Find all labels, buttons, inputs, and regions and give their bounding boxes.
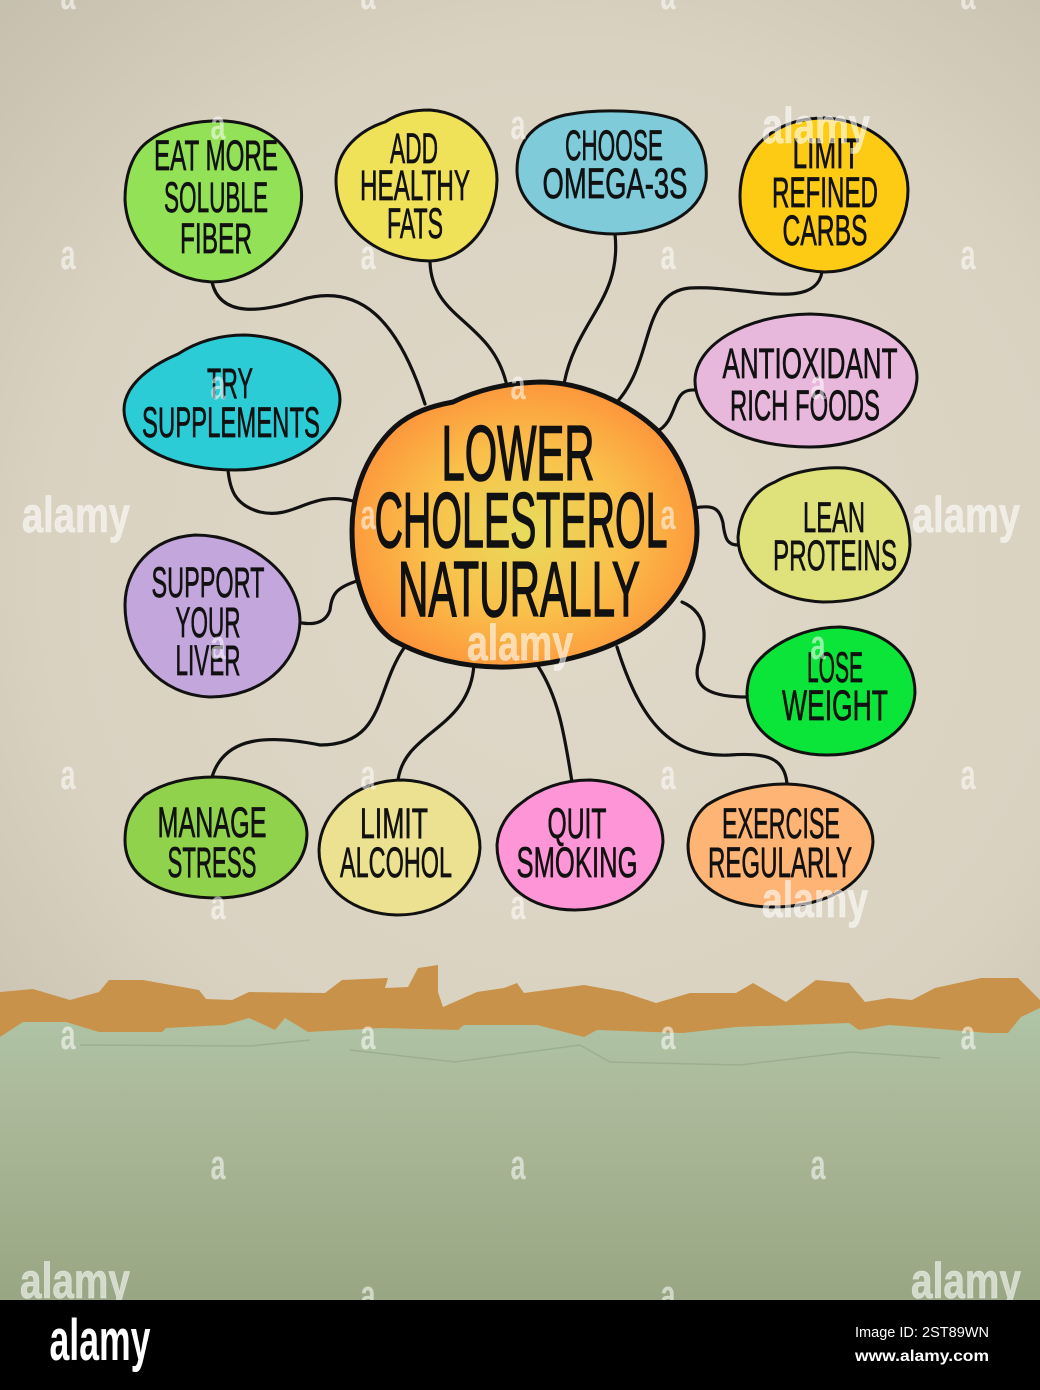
watermarks: a xyxy=(810,621,826,668)
watermarks: a xyxy=(810,361,826,408)
watermarks: a xyxy=(60,231,76,278)
watermarks: a xyxy=(360,231,376,278)
bubble: choose omega-3s xyxy=(517,111,706,234)
bubble: try supplements: SUPPLEMENTS xyxy=(142,399,320,447)
bubble: add healthy fats: FATS xyxy=(387,200,443,248)
footer logo: alamy xyxy=(50,1308,150,1373)
connectors xyxy=(212,234,822,784)
bubble: add healthy fats xyxy=(336,110,497,261)
watermarks: a xyxy=(60,1011,76,1058)
bubble: lose weight: WEIGHT xyxy=(782,682,888,730)
bubble: lean proteins: PROTEINS xyxy=(773,532,897,580)
bubble: quit smoking: QUIT xyxy=(548,800,606,848)
hub title: LOWER xyxy=(442,409,594,497)
watermarks: a xyxy=(510,1141,526,1188)
bubble: manage stress xyxy=(125,777,307,898)
watermarks: a xyxy=(810,1141,826,1188)
watermarks: alamy xyxy=(467,615,573,671)
footer image id: Image ID: 2ST89WN xyxy=(855,1324,989,1341)
hub title: CHOLESTEROL xyxy=(374,476,668,564)
watermarks: a xyxy=(660,1011,676,1058)
watermarks: a xyxy=(510,361,526,408)
bubble: add healthy fats: ADD xyxy=(390,125,438,173)
watermarks: a xyxy=(210,361,226,408)
bubble: eat more soluble fiber xyxy=(125,121,302,282)
bubble: lose weight: LOSE xyxy=(807,644,863,692)
bubble: limit alcohol: ALCOHOL xyxy=(340,839,452,887)
hub title xyxy=(374,409,668,633)
bubble: add healthy fats: HEALTHY xyxy=(360,162,470,210)
watermarks: a xyxy=(660,1271,676,1318)
bubble: eat more soluble fiber: SOLUBLE xyxy=(164,174,268,222)
bubble: eat more soluble fiber: EAT MORE xyxy=(154,132,278,180)
watermarks: a xyxy=(660,751,676,798)
watermarks: a xyxy=(360,491,376,538)
watermarks: a xyxy=(60,751,76,798)
bubble: choose omega-3s: CHOOSE xyxy=(565,122,663,170)
watermarks: alamy xyxy=(762,872,868,928)
watermarks: a xyxy=(210,621,226,668)
watermarks: alamy xyxy=(22,487,130,543)
bubble: limit alcohol xyxy=(319,780,480,915)
bubble: exercise regularly: EXERCISE xyxy=(722,800,840,848)
bubble: limit refined carbs xyxy=(740,118,908,272)
bubble: antioxidant rich foods: RICH FOODS xyxy=(730,382,880,430)
bubble: lose weight xyxy=(747,627,915,755)
watermarks: a xyxy=(960,751,976,798)
central hub xyxy=(352,382,697,667)
green paper xyxy=(0,1008,1040,1300)
bubble: manage stress: MANAGE xyxy=(158,799,266,847)
bubble: antioxidant rich foods xyxy=(695,314,917,447)
watermarks: alamy xyxy=(20,1253,130,1309)
bubble: support your liver: YOUR xyxy=(176,599,240,647)
watermarks: a xyxy=(210,101,226,148)
bubble: exercise regularly: REGULARLY xyxy=(708,839,852,887)
watermarks: a xyxy=(510,101,526,148)
watermarks: a xyxy=(960,1011,976,1058)
bubble: try supplements: TRY xyxy=(207,360,253,408)
background paper xyxy=(0,0,1040,1040)
bubble: exercise regularly xyxy=(688,784,873,907)
bubble: choose omega-3s: OMEGA-3S xyxy=(542,160,688,208)
watermarks: a xyxy=(360,1011,376,1058)
hub title: NATURALLY xyxy=(398,545,640,633)
watermarks: a xyxy=(210,1141,226,1188)
orange torn paper strip xyxy=(0,965,1040,1050)
bubble: quit smoking xyxy=(497,780,663,910)
bubble: support your liver: SUPPORT xyxy=(152,559,264,607)
watermarks: a xyxy=(660,491,676,538)
bubble: quit smoking: SMOKING xyxy=(516,839,638,887)
bubble: antioxidant rich foods: ANTIOXIDANT xyxy=(722,340,898,388)
bubble: lean proteins xyxy=(738,468,910,602)
watermarks: a xyxy=(360,1271,376,1318)
footer bar xyxy=(0,1300,1040,1390)
watermarks: alamy xyxy=(762,98,870,154)
bubble: eat more soluble fiber: FIBER xyxy=(180,215,252,263)
watermarks: a xyxy=(360,751,376,798)
bubble: try supplements xyxy=(124,335,340,470)
watermarks: a xyxy=(510,881,526,928)
bubble: support your liver: LIVER xyxy=(176,637,240,685)
bubble: manage stress: STRESS xyxy=(168,839,256,887)
footer website: www.alamy.com xyxy=(854,1348,989,1365)
watermarks: a xyxy=(660,231,676,278)
watermarks: a xyxy=(960,231,976,278)
bubble: limit refined carbs: LIMIT xyxy=(792,130,860,178)
bubble: limit refined carbs: REFINED xyxy=(772,169,878,217)
watermarks: a xyxy=(210,881,226,928)
bubble: limit refined carbs: CARBS xyxy=(782,207,868,255)
bubble: lean proteins: LEAN xyxy=(803,494,865,542)
bubble: limit alcohol: LIMIT xyxy=(360,800,428,848)
bubble: support your liver xyxy=(125,535,300,697)
